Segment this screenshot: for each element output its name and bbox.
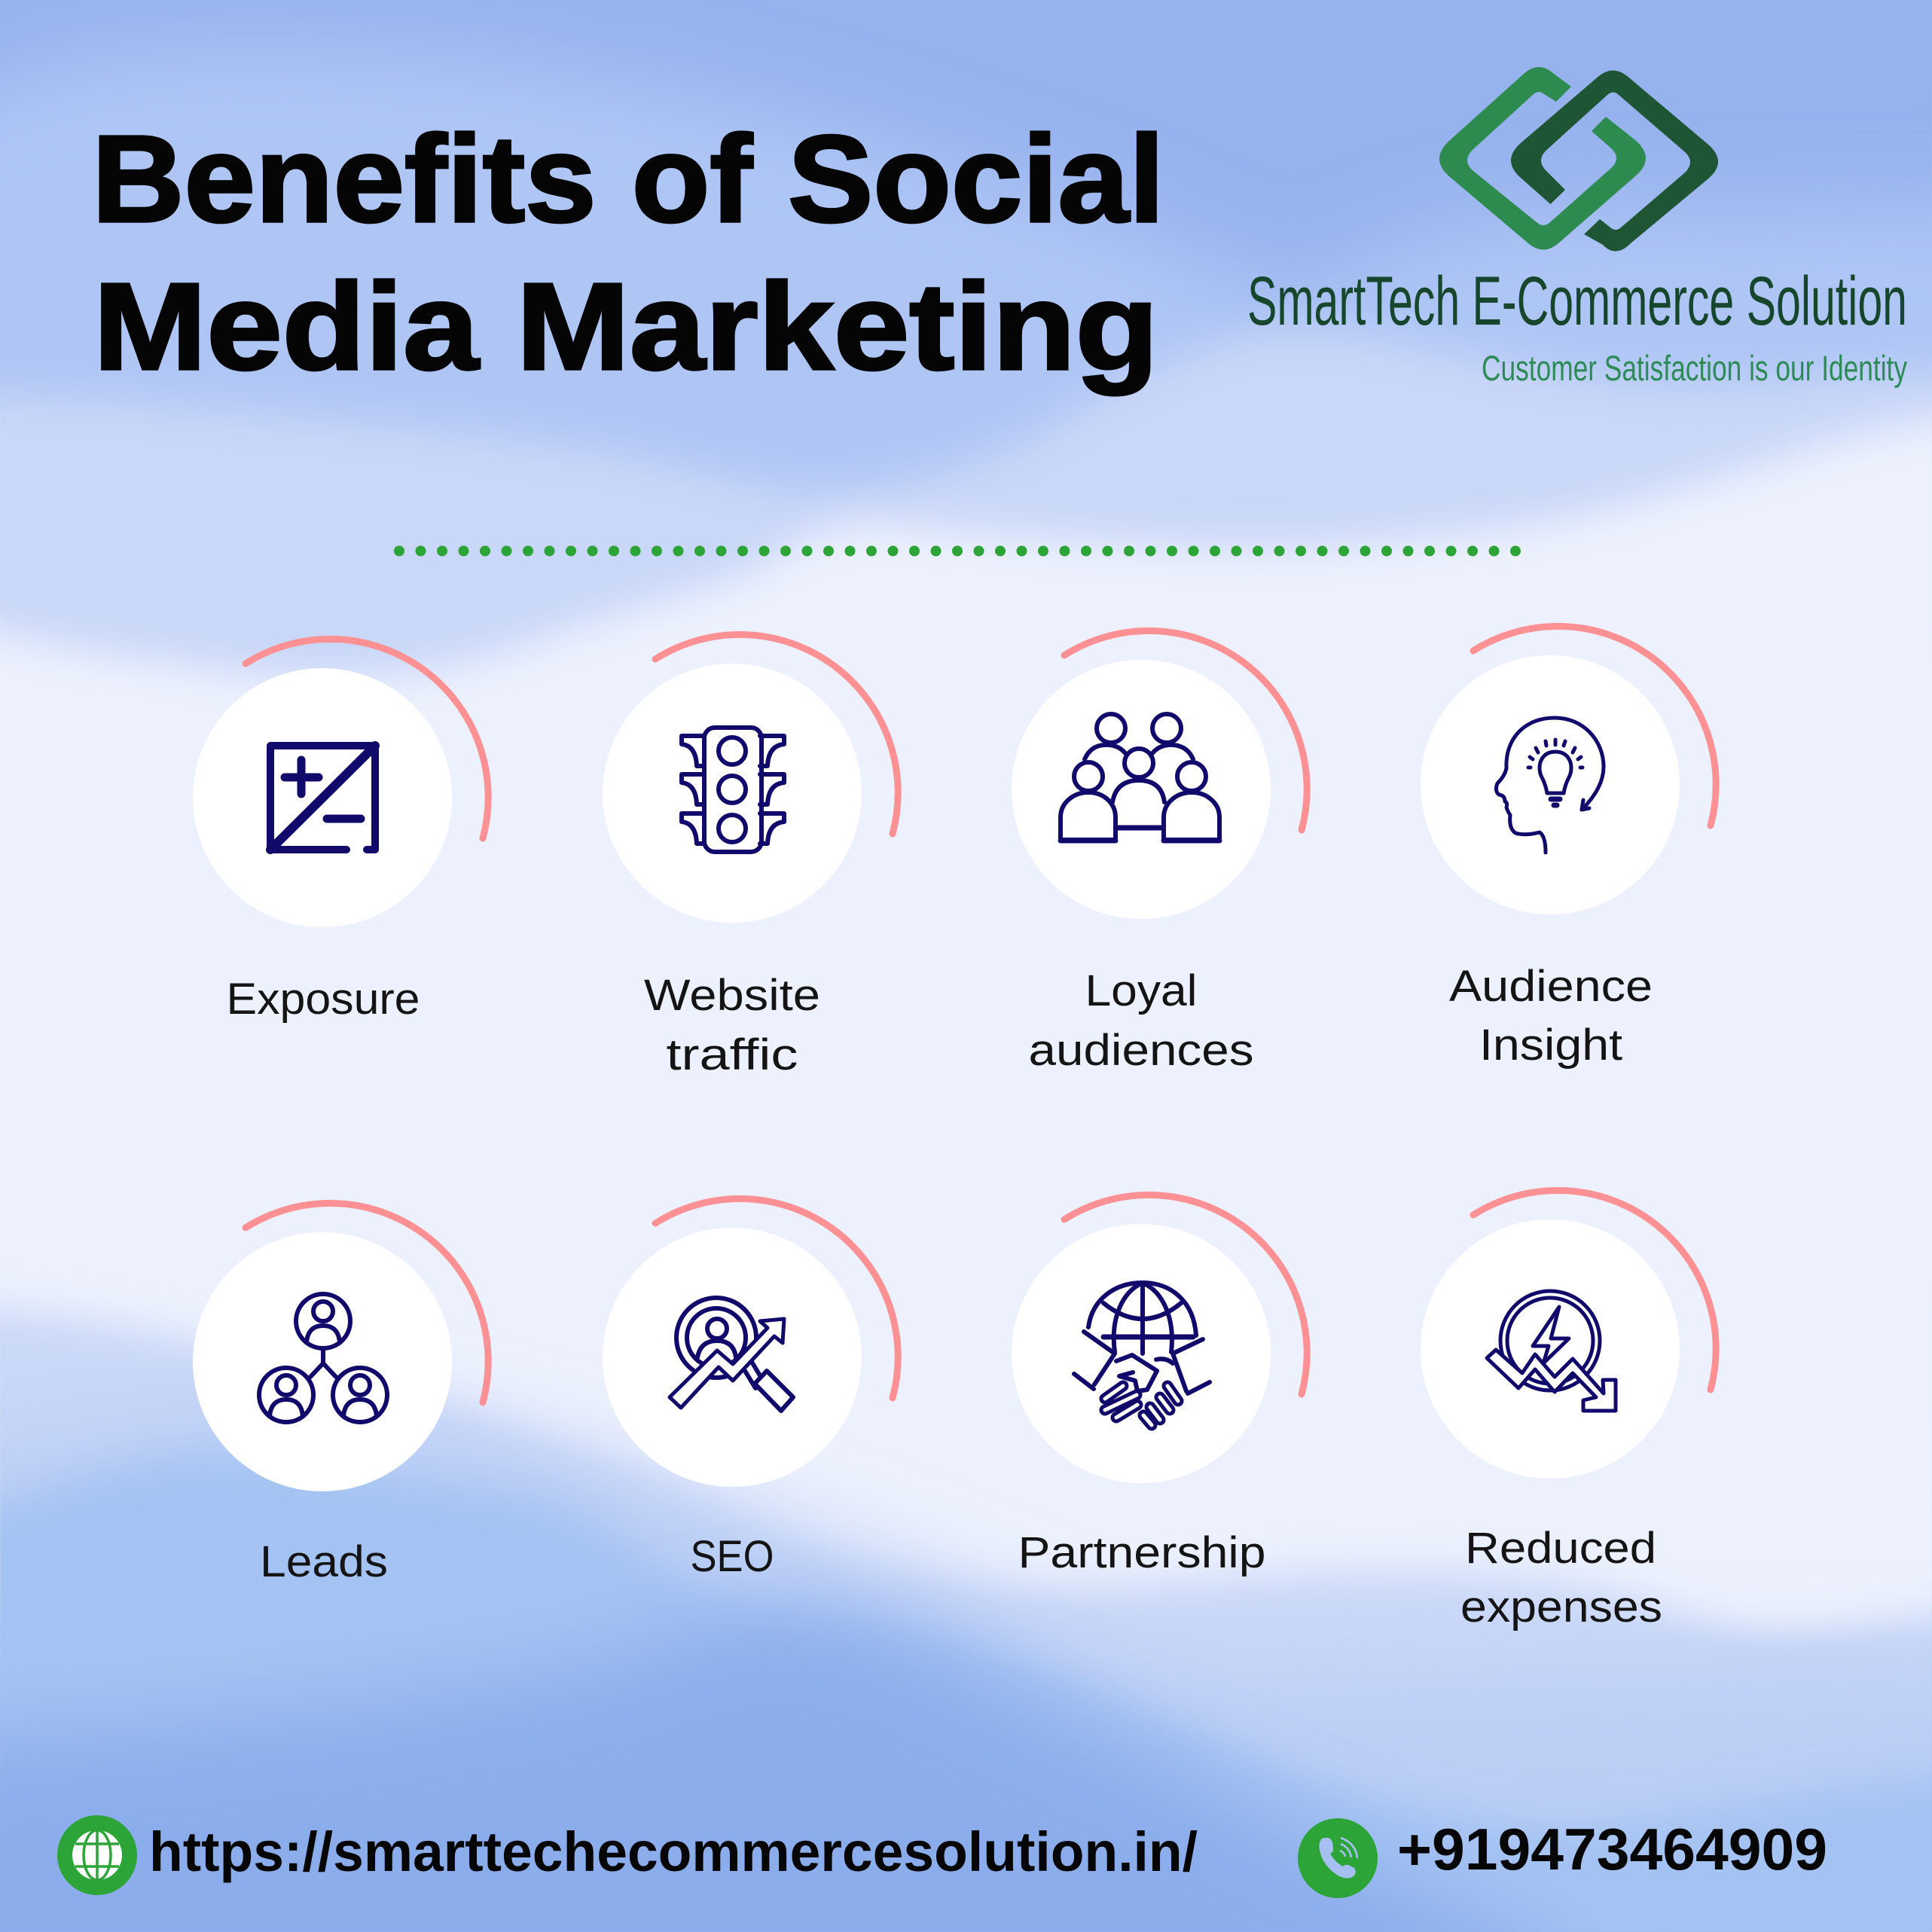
label: Reduced: [1465, 1524, 1656, 1573]
title: Media Marketing: [93, 258, 1158, 395]
white circle: [1012, 1224, 1271, 1483]
label: traffic: [666, 1030, 798, 1079]
label: Exposure: [226, 975, 420, 1024]
accent arc: [1473, 627, 1716, 826]
label: Insight: [1479, 1021, 1622, 1070]
icon: globe: [57, 1815, 137, 1895]
label: Website: [644, 971, 820, 1020]
label: [1029, 966, 1253, 1075]
white circle: [603, 1228, 862, 1487]
icon: group of people: [1061, 714, 1219, 841]
label: [644, 971, 820, 1079]
label: audiences: [1029, 1026, 1253, 1075]
footer: website: [57, 1815, 1198, 1895]
label: SEO: [690, 1532, 774, 1581]
icon: globe and handshake: [1074, 1283, 1210, 1425]
icon: traffic light: [682, 728, 784, 852]
benefit: Loyal audiences: [1012, 631, 1307, 1075]
benefit: Reduced expenses: [1421, 1191, 1716, 1631]
white circle: [1421, 655, 1680, 914]
benefit: Audience Insight: [1421, 627, 1716, 1070]
accent arc: [655, 635, 898, 834]
label: [1460, 1524, 1662, 1631]
logo mark: [1439, 67, 1718, 252]
icon: falling energy cost: [1487, 1291, 1616, 1411]
white circle: [603, 664, 862, 923]
accent arc: [1473, 1191, 1716, 1390]
url text: https://smarttechecommercesolution.in/: [149, 1821, 1198, 1883]
icon: head with lightbulb: [1496, 718, 1604, 853]
label: Leads: [260, 1537, 388, 1586]
icon: exposure: [270, 746, 375, 850]
icon: target with rising arrow: [670, 1298, 793, 1411]
benefit: Leads: [193, 1204, 488, 1586]
benefit: Website traffic: [603, 635, 898, 1079]
icon: connected people: [259, 1294, 387, 1422]
label: expenses: [1460, 1583, 1662, 1631]
benefit: Exposure: [193, 639, 488, 1024]
company logo: [1247, 67, 1907, 388]
accent arc: [1064, 631, 1307, 830]
phone number: +919473464909: [1397, 1816, 1827, 1882]
label: [1449, 962, 1653, 1070]
white circle: [1421, 1219, 1680, 1479]
label: Audience: [1449, 962, 1653, 1011]
icon: phone: [1298, 1818, 1378, 1898]
white circle: [193, 668, 452, 927]
accent arc: [246, 1204, 488, 1402]
footer: phone: [1298, 1816, 1827, 1898]
white circle: [1012, 660, 1271, 919]
accent arc: [655, 1199, 898, 1398]
label: Partnership: [1018, 1528, 1265, 1577]
label: Loyal: [1085, 966, 1198, 1015]
white circle: [193, 1232, 452, 1491]
title: Benefits of Social: [92, 110, 1164, 248]
title: [92, 110, 1164, 395]
benefit: Partnership: [1012, 1195, 1307, 1577]
accent arc: [246, 639, 488, 838]
benefit: SEO: [603, 1199, 898, 1581]
accent arc: [1064, 1195, 1307, 1394]
